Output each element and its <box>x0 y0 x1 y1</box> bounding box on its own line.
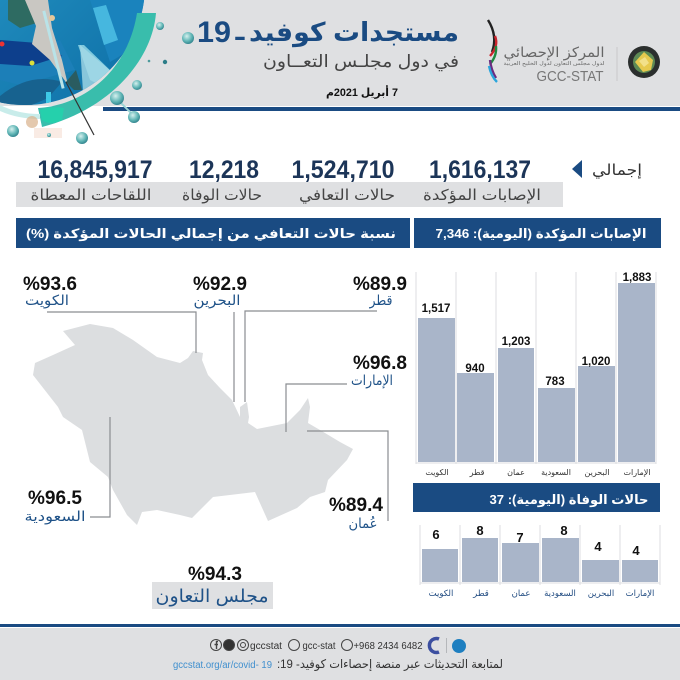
bar chart: daily deaths: 8 <box>476 523 484 538</box>
callout: Saudi Arabia: السعودية <box>24 508 86 525</box>
icon: ribbon flag <box>488 20 497 82</box>
callout: Kuwait: الكويت <box>25 292 69 309</box>
bar chart: daily deaths <box>420 523 660 599</box>
panel heading: daily deaths <box>413 483 660 512</box>
bar chart: daily confirmed: عمان <box>507 468 525 477</box>
bar chart: daily confirmed: 1,020 <box>582 356 610 368</box>
stat: vaccines <box>30 156 152 204</box>
callout: Kuwait: %93.6 <box>23 274 77 295</box>
title: 19 <box>197 16 231 49</box>
callout: Oman: %89.4 <box>329 495 383 516</box>
illustration: virus and towers circle <box>0 0 156 138</box>
icon: GCC emblem <box>628 46 660 78</box>
bar chart: daily deaths: الكويت <box>429 588 453 598</box>
stat: confirmed <box>423 156 541 204</box>
callout: Qatar: قطر <box>369 292 392 309</box>
bar chart: daily confirmed: البحرين <box>585 468 609 477</box>
bar chart: daily deaths: 6 <box>432 527 440 542</box>
icon: syringe needle <box>66 82 94 135</box>
callout: GCC total <box>152 564 273 609</box>
date: 7 أبريل 2021م <box>326 85 398 99</box>
bar chart: daily confirmed: 783 <box>545 376 565 388</box>
panel heading: recovery rate: نسبة حالات التعافي من إجمالي الحالات المؤكدة (%) <box>26 226 396 241</box>
bar chart: daily confirmed: الإمارات <box>623 468 651 478</box>
stat: recovered <box>292 156 395 205</box>
stat: confirmed: الإصابات المؤكدة <box>423 187 541 204</box>
callout: UAE: الإمارات <box>351 372 393 389</box>
callout: UAE: %96.8 <box>353 353 407 374</box>
bar chart: daily deaths: 7 <box>516 530 524 545</box>
logo: GCC-STAT <box>488 20 660 85</box>
logo: GCC-STAT: لدول مجلس التعاون لدول الخليج العربية <box>504 61 605 67</box>
title: ـ <box>235 16 246 46</box>
bar chart: daily deaths: 4 <box>632 543 640 558</box>
callout: Oman: عُمان <box>348 515 378 531</box>
bar chart: daily deaths: البحرين <box>588 588 614 598</box>
bar chart: daily confirmed: 1,517 <box>422 303 450 315</box>
icon: G logo <box>429 638 439 652</box>
callout: GCC total: مجلس التعاون <box>156 586 268 607</box>
stat: deaths: حالات الوفاة <box>182 187 262 204</box>
map: GCC countries <box>33 324 353 525</box>
stat: deaths <box>182 156 262 204</box>
bar chart: daily confirmed: 1,883 <box>623 272 651 284</box>
stat: vaccines: اللقاحات المعطاة <box>30 187 152 204</box>
bar chart: daily confirmed: قطر <box>469 468 485 477</box>
panel heading: recovery rate <box>16 218 410 248</box>
stat: recovered: 1,524,710 <box>292 156 394 184</box>
icon: arrow <box>572 160 582 178</box>
header rule <box>103 107 680 111</box>
footer link line: لمتابعة التحديثات عبر منصة إحصاءات كوفيد- 19: <box>277 657 503 672</box>
footer contacts <box>210 638 466 653</box>
logo: GCC-STAT: المركز الإحصائي <box>504 44 604 61</box>
bar chart: daily deaths: قطر <box>472 588 489 598</box>
totals label band <box>16 182 563 207</box>
bar chart: daily confirmed: 1,203 <box>502 336 530 348</box>
bar chart: daily deaths: عمان <box>512 588 530 598</box>
callout: Oman <box>307 431 388 531</box>
logo: GCC-STAT: GCC-STAT <box>536 69 604 85</box>
title: مستجدات كوفيد <box>249 17 459 48</box>
icon: molecule spheres <box>7 22 194 144</box>
footer rule <box>0 624 680 627</box>
callout: Bahrain: البحرين <box>194 292 240 309</box>
label: total: إجمالي <box>592 162 642 180</box>
footer contacts: gccstat <box>250 641 282 652</box>
icon: round badge <box>452 639 466 653</box>
callout: Qatar: %89.9 <box>353 274 407 295</box>
panel heading: daily deaths: حالات الوفاة (اليومية): 37 <box>490 492 648 507</box>
callout: Kuwait <box>23 274 196 353</box>
footer band <box>0 628 680 680</box>
footer contacts: +968 2434 6482 <box>354 641 423 652</box>
stat: confirmed: 1,616,137 <box>429 156 531 184</box>
header band <box>0 0 680 106</box>
bar chart: daily deaths: 8 <box>560 523 568 538</box>
subtitle: في دول مجلـس التعــاون <box>263 52 459 72</box>
panel heading: daily confirmed: الإصابات المؤكدة (اليومية): 7,346 <box>436 226 646 241</box>
footer link line: gccstat.org/ar/covid- 19 <box>173 660 272 671</box>
callout: Saudi Arabia: %96.5 <box>28 488 82 509</box>
callout: Saudi Arabia <box>24 417 110 525</box>
stat: deaths: 12,218 <box>189 156 259 184</box>
stat: vaccines: 16,845,917 <box>38 156 152 184</box>
callout: UAE <box>286 353 407 432</box>
callout: Qatar <box>245 274 407 402</box>
panel heading: daily confirmed <box>414 218 661 248</box>
bar chart: daily confirmed <box>416 272 656 478</box>
stat: recovered: حالات التعافي <box>299 187 395 205</box>
callout: GCC total: %94.3 <box>188 564 242 585</box>
bar chart: daily deaths: السعودية <box>544 588 576 598</box>
icon: social circles <box>210 640 352 650</box>
bar chart: daily deaths: الإمارات <box>626 588 654 599</box>
footer link line <box>173 657 503 672</box>
callout: Bahrain: %92.9 <box>193 274 247 295</box>
bar chart: daily deaths: 4 <box>594 539 602 554</box>
crescent ring <box>38 13 156 127</box>
bar chart: daily confirmed: السعودية <box>541 468 571 477</box>
bar chart: daily confirmed: الكويت <box>425 468 449 477</box>
bar chart: daily confirmed: 940 <box>465 363 485 375</box>
footer contacts: gcc-stat <box>302 641 336 652</box>
callout: Bahrain <box>193 274 247 402</box>
